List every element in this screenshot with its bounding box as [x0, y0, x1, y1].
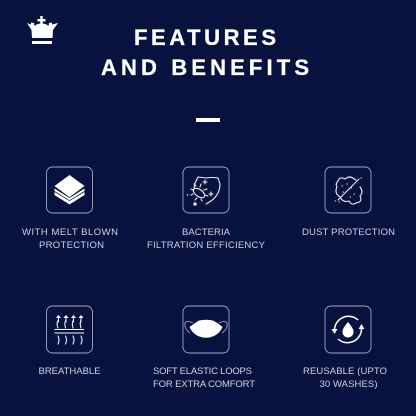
label: FOR EXTRA COMFORT — [153, 379, 255, 390]
title: FEATURES — [134, 25, 276, 50]
label: WITH MELT BLOWN — [22, 227, 118, 238]
icon: crown logo — [27, 16, 58, 44]
label — [153, 366, 255, 390]
label: SOFT ELASTIC LOOPS — [153, 366, 252, 377]
label — [303, 366, 387, 390]
label: FILTRATION EFFICIENCY — [147, 240, 266, 251]
icon: layered sheets — [46, 167, 92, 213]
title — [101, 25, 309, 80]
panel: soft elastic loops — [153, 306, 255, 390]
label — [147, 227, 266, 251]
title: AND BENEFITS — [101, 55, 309, 80]
label: REUSABLE (UPTO — [303, 366, 387, 377]
panel: bacteria filtration efficiency — [147, 167, 266, 251]
label: PROTECTION — [39, 240, 104, 251]
panel: breathable — [38, 306, 100, 377]
icon: water drop with cycle arrows — [325, 306, 371, 353]
icon: air passing through fabric — [46, 306, 92, 353]
label: BREATHABLE — [38, 366, 100, 377]
label: BACTERIA — [182, 227, 231, 238]
label — [22, 227, 118, 251]
panel: melt blown protection — [22, 167, 118, 251]
icon: face mask — [183, 306, 229, 353]
icon: dust cloud with slash — [325, 167, 371, 213]
title accent dash — [196, 118, 220, 122]
panel: dust protection — [302, 167, 395, 238]
panel: reusable — [303, 306, 387, 390]
icon: shield and bacteria — [183, 167, 229, 213]
label: 30 WASHES) — [320, 379, 378, 390]
label: DUST PROTECTION — [302, 227, 395, 238]
